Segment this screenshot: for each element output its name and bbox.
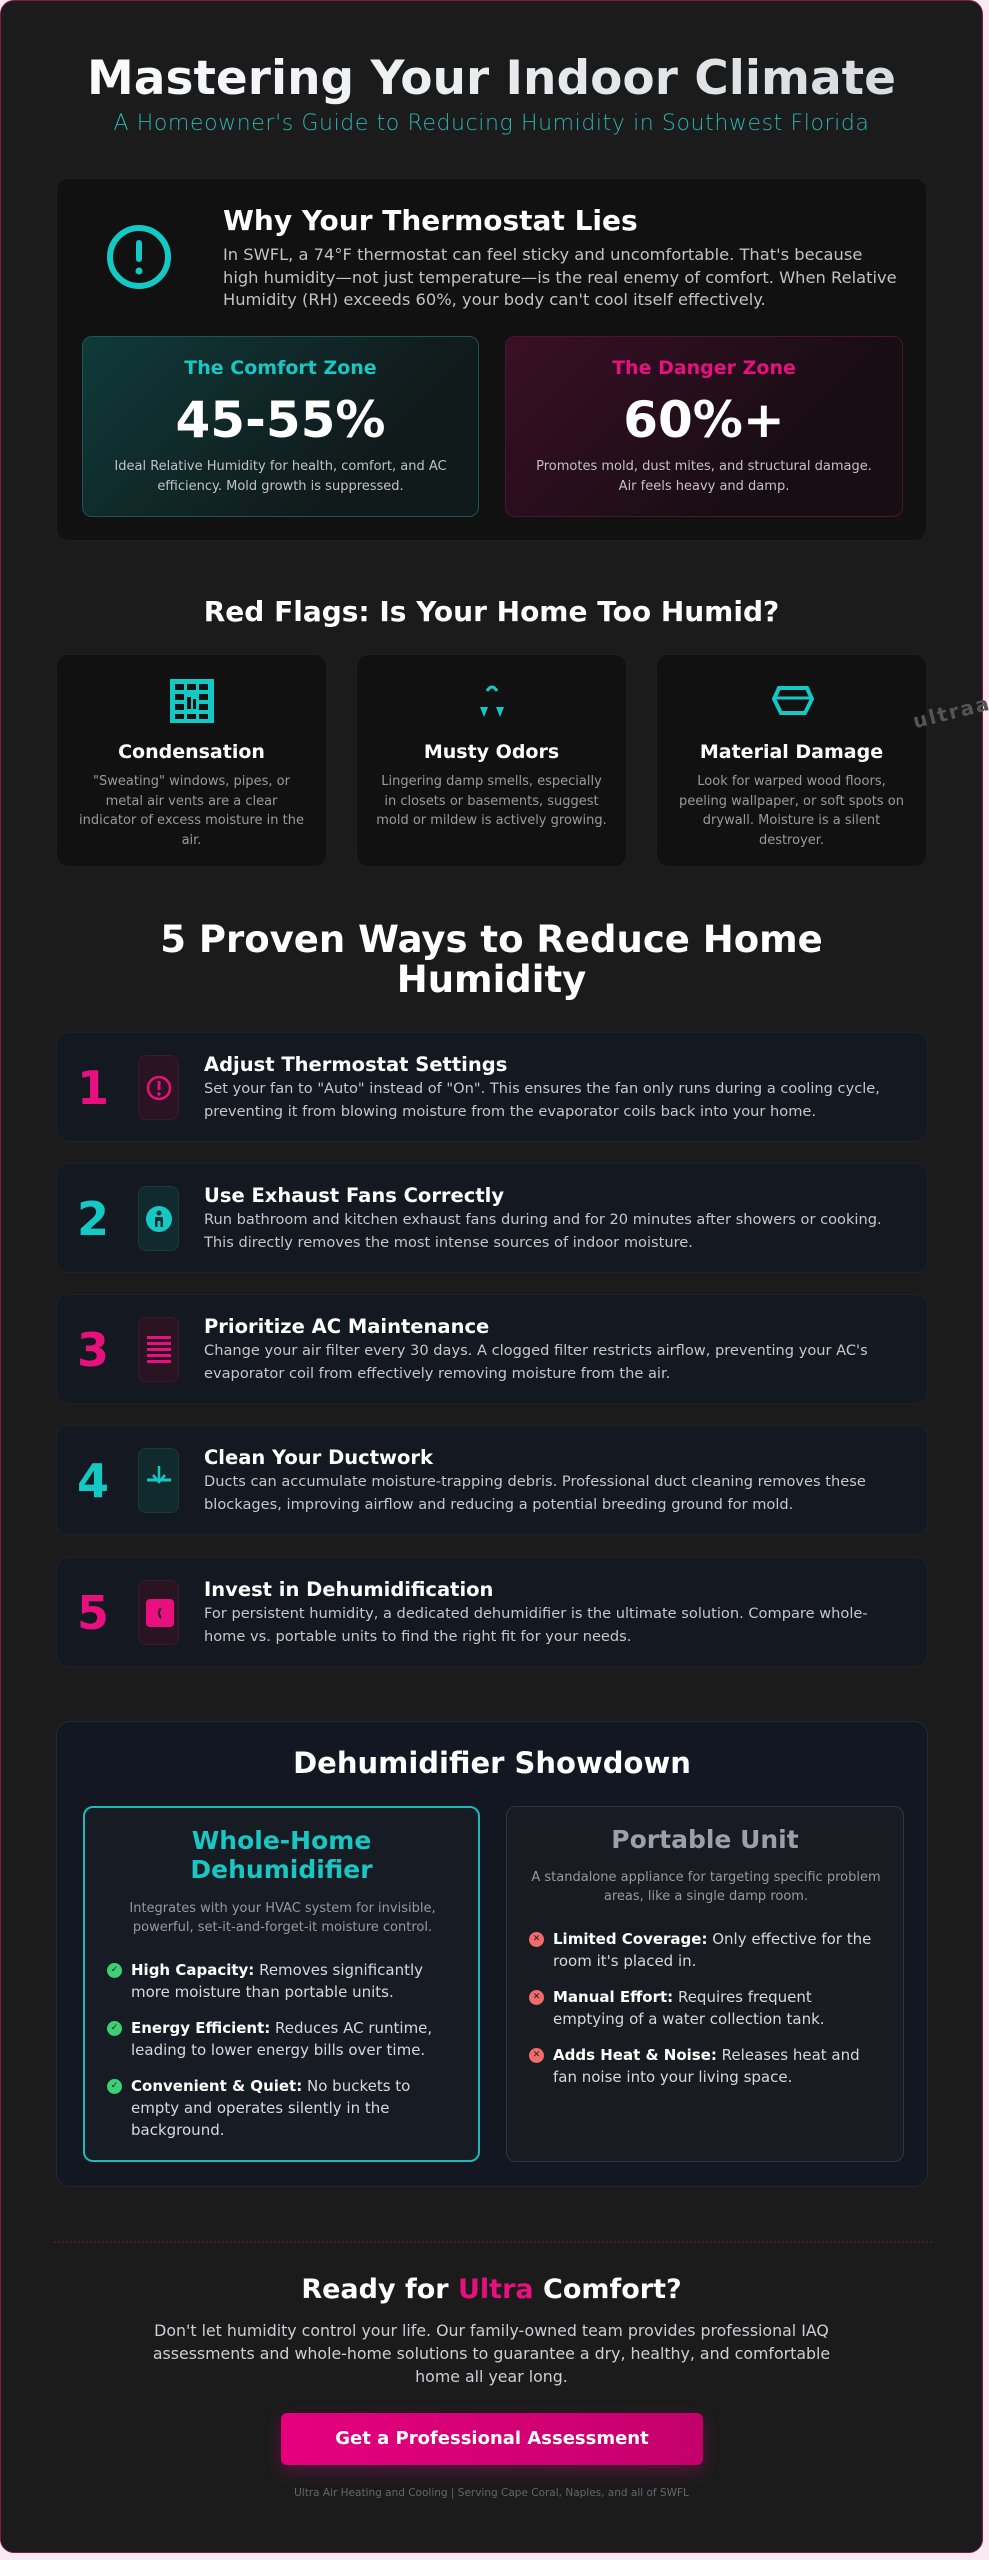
paragraph: high humidity—not just temperature—is the real enemy of comfort. When Relative — [223, 268, 897, 286]
step 1: 1 — [77, 1061, 109, 1115]
danger zone box: Promotes mold, dust mites, and structural damage. — [536, 459, 872, 474]
step 2: Run bathroom and kitchen exhaust fans during and for 20 minutes after showers or cooking. This directly removes the most intense sources of indoor moisture. — [204, 1211, 882, 1251]
card: whole-home: ✓ — [111, 2023, 118, 2033]
footer: Ultra Air Heating and Cooling | Serving Cape Coral, Naples, and all of SWFL — [294, 2487, 689, 2499]
panel: condensation — [56, 654, 327, 867]
heading: Why Your Thermostat Lies — [223, 204, 638, 237]
panel: material damage: Material Damage — [700, 741, 883, 763]
icon: person — [138, 1186, 179, 1251]
button — [281, 2413, 703, 2465]
panel: material damage — [656, 654, 927, 867]
heading: 5 proven ways: 5 Proven Ways to Reduce Home Humidity — [160, 918, 823, 1001]
panel: material damage: destroyer. — [759, 832, 824, 848]
button: Get a Professional Assessment — [335, 2428, 649, 2449]
card: portable unit: A standalone appliance for targeting specific problem areas, like a single damp room. — [531, 1870, 881, 1904]
panel: musty odors: Lingering damp smells, especially — [381, 774, 602, 789]
card: portable unit: Limited Coverage: Only effective for the room it's placed in. — [553, 1930, 871, 1970]
panel: condensation: Condensation — [118, 741, 265, 763]
step 1: Adjust Thermostat Settings — [204, 1053, 507, 1076]
step 2 — [56, 1163, 928, 1273]
card: whole-home: Energy Efficient: Reduces AC runtime, leading to lower energy bills over time. — [131, 2019, 432, 2059]
panel: musty odors — [356, 654, 627, 867]
card: whole-home — [83, 1806, 480, 2162]
card: portable unit: Adds Heat & Noise: Releases heat and fan noise into your living space. — [553, 2046, 860, 2086]
step 5: For persistent humidity, a dedicated dehumidifier is the ultimate solution. Compare whole-home vs. portable units to find the right fit for your needs. — [204, 1605, 868, 1645]
card: whole-home: Dehumidifier — [190, 1855, 373, 1884]
paragraph: Humidity (RH) exceeds 60%, your body can't cool itself effectively. — [223, 290, 766, 309]
card: portable unit: ✕ — [533, 1934, 540, 1944]
panel: material damage: peeling wallpaper, or soft spots on — [679, 794, 904, 808]
icon: odor — [480, 686, 504, 717]
icon: warning circle — [107, 225, 171, 289]
step 1 — [56, 1032, 928, 1142]
step 5 — [56, 1557, 928, 1667]
step 2: 2 — [77, 1192, 109, 1246]
icon: damage — [772, 686, 814, 715]
panel: condensation: metal air vents are a clear — [106, 794, 277, 808]
step 5: 5 — [77, 1586, 109, 1640]
card: portable unit: Manual Effort: Requires frequent emptying of a water collection tank. — [553, 1988, 825, 2028]
panel: musty odors: Musty Odors — [424, 741, 559, 763]
card: portable unit — [506, 1806, 904, 2162]
heading: Dehumidifier Showdown — [293, 1746, 691, 1780]
step 4: Clean Your Ductwork — [204, 1446, 433, 1469]
card: whole-home: ✓ — [111, 1965, 118, 1975]
step 5: Invest in Dehumidification — [204, 1578, 493, 1601]
card: portable unit: ✕ — [533, 2050, 540, 2060]
card: portable unit: Portable Unit — [611, 1825, 799, 1854]
step 1: Set your fan to "Auto" instead of "On". This ensures the fan only runs during a cooling cycle, preventing it from blowing moisture from the evaporator coils back into your home. — [204, 1080, 880, 1120]
panel: material damage: Look for warped wood floors, — [697, 774, 886, 789]
card: portable unit: ✕ — [533, 1992, 540, 2002]
panel: condensation: "Sweating" windows, pipes, or — [93, 774, 290, 789]
step 4: 4 — [77, 1454, 109, 1508]
danger zone box — [505, 336, 903, 517]
step 3: Prioritize AC Maintenance — [204, 1315, 489, 1338]
card: whole-home: ✓ — [111, 2081, 118, 2091]
comfort zone box: 45-55% — [175, 391, 386, 449]
subtitle: A Homeowner's Guide to Reducing Humidity in Southwest Florida — [113, 111, 870, 136]
icon: filter lines — [138, 1317, 179, 1382]
step 3: Change your air filter every 30 days. A clogged filter restricts airflow, preventing your AC's evaporator coil from effectively removing moisture from the air. — [204, 1342, 868, 1382]
comfort zone box: efficiency. Mold growth is suppressed. — [157, 479, 404, 494]
panel: musty odors: in closets or basements, suggest — [384, 794, 599, 808]
step 3: 3 — [77, 1323, 109, 1377]
danger zone box: 60%+ — [623, 391, 785, 449]
heading: red flags: Red Flags: Is Your Home Too Humid? — [204, 595, 779, 628]
icon: duct arrow — [138, 1448, 179, 1513]
paragraph: In SWFL, a 74°F thermostat can feel sticky and uncomfortable. That's because — [223, 245, 862, 264]
comfort zone box: The Comfort Zone — [184, 357, 377, 379]
danger zone box: The Danger Zone — [612, 357, 796, 379]
cta paragraph: Don't let humidity control your life. Our family-owned team provides professional IAQ assessments and whole-home solutions to guarantee a dry, healthy, and comfortable home all year long. — [153, 2321, 830, 2386]
icon: window grid — [170, 679, 214, 723]
panel: condensation: air. — [182, 832, 201, 848]
step 3 — [56, 1294, 928, 1404]
comfort zone box: Ideal Relative Humidity for health, comfort, and AC — [114, 459, 447, 474]
title: Mastering Your Indoor Climate — [87, 51, 896, 106]
panel: musty odors: mold or mildew is actively growing. — [376, 813, 607, 828]
card: whole-home: High Capacity: Removes significantly more moisture than portable units. — [131, 1961, 423, 2001]
step 2: Use Exhaust Fans Correctly — [204, 1184, 504, 1207]
icon: exclamation — [138, 1055, 179, 1120]
danger zone box: Air feels heavy and damp. — [619, 479, 789, 494]
step 4: Ducts can accumulate moisture-trapping debris. Professional duct cleaning removes these blockages, improving airflow and reducing a potential breeding ground for mold. — [204, 1473, 866, 1513]
comfort zone box — [82, 336, 479, 517]
panel: dehumidifier showdown — [56, 1721, 928, 2187]
heading: ready for ultra comfort: Ready for Ultra Comfort? — [301, 2274, 682, 2305]
panel: condensation: indicator of excess moisture in the — [79, 813, 304, 828]
card: whole-home: Whole-Home — [192, 1826, 371, 1855]
card: whole-home: Integrates with your HVAC system for invisible, powerful, set-it-and-forget-it moisture control. — [129, 1901, 436, 1935]
paragraph — [223, 245, 897, 309]
panel: why your thermostat lies — [56, 178, 927, 541]
step 4 — [56, 1425, 928, 1535]
card: whole-home: Convenient & Quiet: No buckets to empty and operates silently in the background. — [131, 2077, 410, 2139]
icon: dehumidifier — [138, 1580, 179, 1645]
panel: material damage: drywall. Moisture is a silent — [703, 813, 880, 828]
